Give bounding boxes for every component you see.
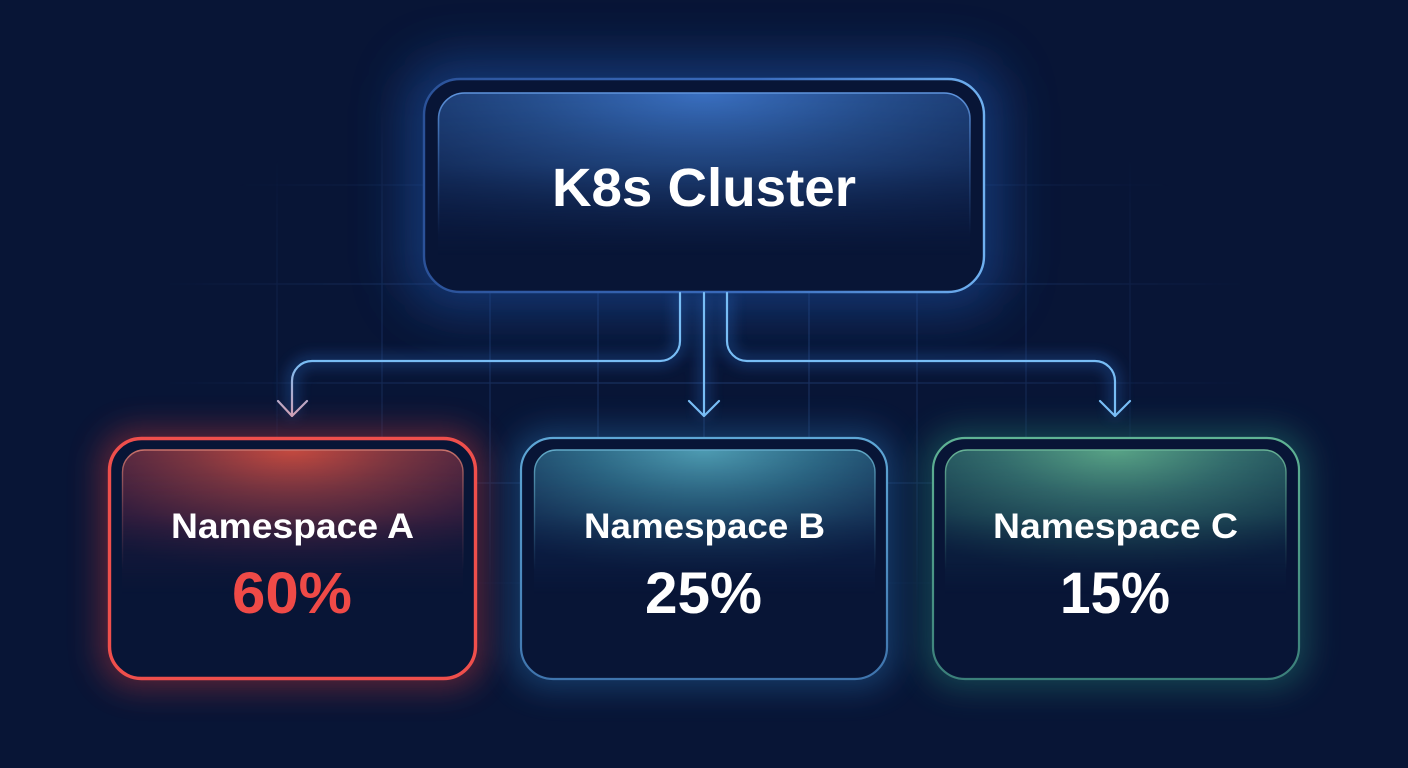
panel: K8s Cluster (424, 79, 984, 292)
connector: to namespace B (689, 293, 719, 416)
connectors (278, 293, 1130, 416)
connector glow (292, 292, 1115, 416)
namespace C label: Namespace C (993, 507, 1238, 546)
cluster glow (405, 60, 1003, 310)
background grid (219, 154, 1189, 564)
namespace A inner panel (122, 449, 464, 567)
panel: Namespace A (110, 438, 476, 678)
cluster heading: K8s Cluster (552, 158, 856, 218)
namespace A label: Namespace A (171, 507, 414, 546)
namespace B inner panel (534, 449, 876, 568)
namespace B value: 25% (645, 561, 762, 626)
namespace C value: 15% (1060, 561, 1170, 626)
panel: Namespace B (521, 438, 887, 679)
connector: to namespace C (727, 293, 1130, 416)
namespace A value: 60% (232, 561, 352, 626)
namespace C inner panel (944, 449, 1287, 567)
cluster inner panel (438, 92, 971, 232)
namespace B label: Namespace B (584, 507, 825, 546)
panel: Namespace C (933, 438, 1299, 679)
connector: to namespace A (278, 293, 680, 416)
namespace glows (100, 429, 1308, 688)
